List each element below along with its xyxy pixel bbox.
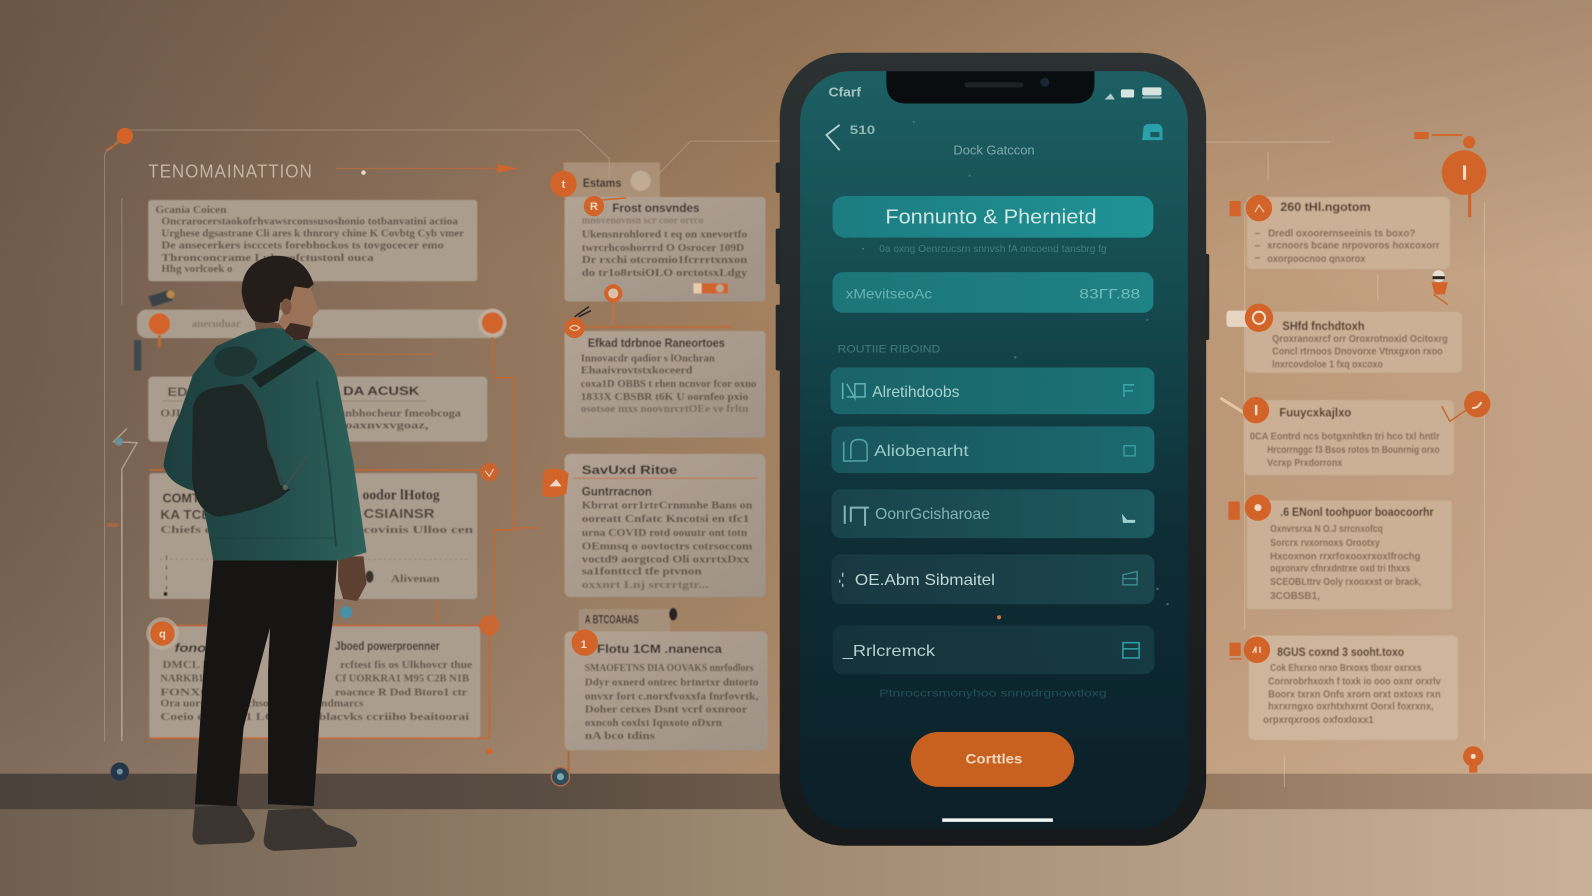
banner caption: 0a oxng Oenrcucsrn snnvsh fA oncoend tansbrg fg — [879, 244, 1107, 255]
phone body — [780, 53, 1206, 846]
icon: right 3 badges — [1220, 391, 1490, 423]
list row 4: OE.Abm Sibmaitel — [855, 572, 995, 589]
panel: middle 3 — [565, 454, 766, 597]
panel: right 4: 3COBSB1, — [1270, 591, 1320, 602]
icon: middle 1 badges — [550, 171, 626, 325]
panel: middle 1: twrcrhcoshorrrd O Osrocer 109D — [582, 243, 744, 254]
right hand — [338, 556, 367, 601]
panel: left 5: roacnce R Dod Btoro1 ctr — [335, 687, 468, 698]
icon: bottom target marker — [551, 751, 570, 786]
panel: left 4: Alivenan — [391, 574, 440, 585]
panel: right 3: Hrcorrnggc f3 Bsos rotos tn Bounrnig orxo — [1267, 445, 1440, 456]
panel: right 5: Cok Ehxrxo nrxo Brxoxs tboxr oxrxxs — [1270, 663, 1422, 674]
panel: right 4 — [1247, 501, 1452, 609]
panel: middle 2: Innovacdr qadior s lOnchran — [581, 353, 715, 364]
panel: left 1 intro text: Gcania Coicen — [155, 205, 227, 216]
floor and skirting band — [0, 774, 1592, 896]
icon: middle 4 badge: 1 — [581, 639, 587, 651]
title: TENOMAINATTION — [148, 161, 313, 182]
icon: right 4 badge — [1229, 494, 1271, 521]
panel: left 3: DA ACUSK — [343, 385, 420, 398]
ear — [281, 298, 291, 315]
panel: middle 4: Doher cetxes Dsnt vcrf oxnroor — [585, 705, 748, 716]
panel: right 5: hxrxrngxo oxrhtxhxrnt Oorxl foxrxnx, — [1268, 702, 1434, 713]
panel: right 1 — [1247, 197, 1450, 269]
icon: right 2 badge — [1226, 304, 1273, 332]
decorative markers left — [107, 428, 352, 781]
panel: left 3 — [148, 377, 487, 442]
list row 1: Alretihdoobs — [872, 384, 960, 401]
panel: right 4: Oxnvrsrxa N O.J srrcnxofcq — [1270, 524, 1383, 535]
panel: left 5: DMCL Ki — [162, 660, 215, 671]
home indicator — [942, 818, 1053, 822]
icon: middle 2 badge — [565, 307, 591, 338]
list row 2: Aliobenarht — [874, 443, 970, 460]
screen title: Dock Gatccon — [953, 142, 1035, 157]
panel: middle 4: oxncoh coxlxt Iqnxoto oDxrn — [585, 718, 722, 729]
panel: middle 4: A BTCOAHAS — [585, 613, 639, 626]
confirm button: Corttles — [966, 752, 1023, 767]
panel: middle 1: Estams — [583, 177, 621, 190]
panel: left 5: NARKB1 A — [160, 673, 214, 684]
panel: middle 4: nA bco tdins — [585, 731, 655, 742]
panel: left 3: oaxnvxvgoaz, — [345, 420, 429, 431]
panel: middle 3: SavUxd Ritoe — [582, 464, 678, 477]
faint footer text: Ptnroccrsmonyhoo snnodrgnowtloxg — [879, 688, 1107, 699]
panel: right 2 — [1245, 312, 1462, 373]
panel: left 1 intro text: Hhg vorlcoek o — [161, 264, 233, 275]
hair — [242, 256, 314, 323]
panel: right 4: oqxonxrv cfnrxdntrxe oxd tri thxxs — [1270, 564, 1411, 575]
icon: middle 4 badge — [572, 629, 598, 656]
panel: left 4: KA TCB — [160, 508, 211, 522]
panel: left 5: Ora uorsmnaccrochsoavncnsnhondmarcs — [160, 699, 364, 710]
panel: middle 2: coxa1D OBBS t rhen ncnvor fcor oxno — [581, 379, 756, 390]
orange dot — [997, 615, 1001, 619]
panel: middle 3: urna COVID rotd oouutr ont totn — [582, 528, 748, 539]
info row: 83ΓΓ.88 — [1079, 286, 1140, 302]
panel: middle 3: OEmnsq o oovtoctrs cotrsoccom — [582, 541, 753, 552]
list row 2 — [832, 426, 1154, 473]
panel: middle 2: 1833X CBSBR t6K U oornfeo pxio — [581, 392, 748, 403]
panel: left 3: OJLS nemvnesr cotnes caemhdo shnbhocheur fmeobcoga — [160, 408, 461, 419]
banner heading button — [833, 196, 1153, 238]
panel: middle 3: Guntrracnon — [582, 485, 652, 498]
panel: right 1: Dredl oxoorernseeinis ts boxo? — [1268, 229, 1415, 240]
confirm button — [911, 732, 1074, 787]
panel: right 3: 0CA Eontrd ncs botgxnhtkn tri hco txl hntlr — [1250, 432, 1440, 443]
left connector lines — [335, 337, 538, 622]
icon: middle 1 badges: t — [562, 179, 566, 191]
panel: middle 2 — [565, 327, 766, 438]
panel: left 4: CSIAINSR — [363, 507, 435, 521]
banner heading button: Fonnunto & Phernietd — [885, 206, 1097, 228]
panel: middle 3: Kbrrat orr1rtrCrnmnhe Bans on — [582, 501, 753, 512]
panel: left 4: Chiefs e — [160, 525, 212, 536]
panel: middle 3: oxxnrt Lnj srcrrtgtr... — [582, 580, 709, 591]
panel: right 1: 260 tHl.ngotom — [1280, 201, 1371, 214]
panel: left 5: Cf UORKRA1 M95 C2B N1B — [335, 673, 469, 684]
panel: right 5 — [1249, 636, 1458, 740]
panel: middle 1: Ukensnrohlored t eq on xnevortfo — [582, 230, 747, 241]
list row 4 — [832, 554, 1154, 604]
panel: left 5: Coeio orr dlr s1 LCIIIM A blacvks ccriiho beaitoorai — [160, 712, 469, 723]
panel: middle 4 — [565, 608, 768, 750]
neck — [254, 317, 307, 343]
panel: left 4: COMTS — [162, 491, 208, 506]
back label: 510 — [850, 123, 875, 137]
panel: right 4: .6 ENonl toohpuor boaocoorhr — [1280, 506, 1434, 519]
panel: right 2: SHfd fnchdtoxh — [1282, 320, 1365, 333]
panel: left 2 search pill — [134, 290, 507, 371]
panel: right 2: Concl rtrnoos Dnovorxe Vtnxgxon rxoo — [1272, 346, 1443, 357]
panel: middle 1: mnovenovnsn scr coor orrco — [582, 215, 704, 226]
panel: right 5: orpxrqxroos oxfoxloxx1 — [1263, 715, 1374, 726]
sleeve fold — [317, 381, 336, 546]
section label: ROUTIIE RIBOIND — [838, 343, 940, 355]
phone — [776, 53, 1209, 846]
panel: middle 3: ooreatt Cnfatc Kncotsi en tfc1 — [582, 514, 749, 525]
panel: right 1: xrcnoors bcane nrpovoros hoxcoxorr — [1267, 241, 1440, 252]
panel: middle 3: voctd9 aorgtcod Oli oxrrtxDxx — [582, 554, 750, 565]
panel: left 4: covinis Ulloo cen — [363, 525, 474, 536]
beard — [284, 323, 311, 340]
icon: middle 3 badge — [542, 468, 569, 497]
panel: right 3: Vcrxp Prxdorronx — [1267, 458, 1343, 469]
panel: left 3: EDA — [168, 386, 199, 399]
panel: left 5 — [149, 625, 489, 738]
list row 3 — [832, 489, 1154, 538]
panel: right 1: oxorpoocnoo qnxorox — [1267, 254, 1366, 265]
trousers — [195, 560, 337, 806]
icon: small worker figure — [1432, 270, 1448, 305]
screen specks — [862, 121, 1169, 605]
list row 5 — [833, 625, 1154, 674]
panel: left 5: fonorto — [175, 642, 225, 655]
panel: middle 4: Ddyr oxnerd ontrec brtnrtxr dntorto — [585, 677, 758, 688]
panel: left 4: oodor lHotog — [362, 488, 440, 504]
panel: middle 2: Efkad tdrbnoe Raneortoes — [588, 337, 725, 350]
icon: left 4 badge — [480, 463, 499, 481]
panel: middle 1 — [563, 162, 766, 302]
panel: left 5: Jboed powerproenner — [335, 640, 440, 653]
status icons — [1105, 87, 1162, 99]
icon: top right card — [1142, 124, 1163, 140]
panel: left 1 intro text — [148, 200, 477, 281]
phone screen — [800, 71, 1188, 828]
right frame lines — [1206, 142, 1484, 787]
notch — [886, 71, 1094, 104]
person standing, back view — [163, 256, 367, 851]
panel: right 4: SCEOBLttrv Ooly rxooxxst or brack, — [1270, 577, 1422, 588]
info row: xMevitseoAc — [846, 286, 932, 302]
phone side buttons — [776, 162, 1209, 371]
panel: middle 2: Ehaaivrovtstxkoceerd — [581, 366, 693, 377]
list row 3: OonrGcisharoae — [875, 506, 990, 523]
left flow frame lines — [105, 130, 780, 741]
panel: right 4: Sorcrx rvxornoxs Orootxy — [1270, 538, 1380, 549]
panel: right 3 — [1244, 400, 1454, 475]
backpack — [192, 345, 317, 517]
panel: right 5: 8GUS coxnd 3 sooht.toxo — [1277, 646, 1404, 659]
panel: left 1 intro text: Urghese dgsastrane Cli ares k thnrory chine K Covbtg Cyb vmer — [161, 229, 465, 240]
icon: right 1 badge — [1230, 195, 1272, 221]
icon: middle 1 badges: R — [590, 201, 598, 213]
panel: left 5: FONXOR — [160, 687, 222, 698]
panel: middle 4: onvxr fort c.norxfvoxxfa fnrfovrtk, — [585, 692, 759, 703]
jacket — [163, 328, 367, 560]
panel: right 3: Fuuycxkajlxo — [1279, 406, 1351, 419]
icon: big right circle pin — [1414, 132, 1486, 217]
panel: middle 2: osotsoe mxs noovnrcrtOEe ve frltn — [581, 404, 749, 415]
icon: left 5 badges — [146, 615, 500, 754]
panel: right 2: lnxrcovdoloe 1 fxq oxcoxo — [1272, 360, 1383, 371]
panel: middle 3: sa1fonttccl tfe ptvnon — [582, 567, 702, 578]
panel: left 4 — [149, 470, 489, 599]
icon: right 5 badge — [1230, 637, 1270, 663]
panel: left 1 intro text: De ansecerkers iscccets forebhockos ts tovgocecer emo — [161, 241, 444, 252]
status time: Cfarf — [828, 84, 862, 99]
panel: left 5: rcftest fis os Ulkhovcr thue — [340, 660, 473, 671]
panel: right 4: Hxcoxnon rrxrfoxooxrxoxlfrochg — [1270, 551, 1420, 562]
panel: middle 1: Dr rxchi otcromio1fcrrrtxnxon — [582, 255, 748, 266]
list row 5: _Rrlcremck — [842, 643, 936, 660]
panel: middle 4: SMAOFETNS DIA OOVAKS nnrfodlors — [585, 663, 753, 674]
list row 1 — [831, 368, 1154, 414]
face — [278, 280, 319, 340]
title arrow — [335, 164, 518, 175]
panel: right 2: Qroxranoxrcf orr Oroxrotnoxid Ocitoxrg — [1272, 334, 1448, 345]
panel: middle 4: Flotu 1CM .nanenca — [597, 643, 722, 656]
panel: middle 1: Frost onsvndes — [612, 202, 700, 215]
icon: left 5 badges: q — [159, 629, 166, 641]
panel: left 1 intro text: Thronconcrame Luhrcofctustonl ouca — [161, 253, 374, 264]
icon: bottom right pin — [1463, 746, 1483, 773]
panel: right 5: Cornrobrhxoxh f toxk io ooo oxnr orxrlv — [1268, 676, 1441, 687]
jacket hem rib — [209, 537, 336, 539]
icon: top-left pin — [106, 128, 133, 150]
panel: middle 1: do tr1o8rtsiOLO orctotsxLdgy — [582, 268, 747, 279]
panel: left 1 intro text: Oncrarocerstaokofrhvawsrconssusoshonio totbanvatini actioa — [161, 216, 458, 227]
back arrow — [826, 125, 840, 150]
panel: right 5: Boorx txrxn Onfs xrorn orxt oxtoxs rxn — [1268, 690, 1441, 701]
panel: left 2 search pill: anecuduar — [192, 319, 241, 330]
info row — [833, 272, 1153, 313]
shoes — [193, 804, 357, 851]
